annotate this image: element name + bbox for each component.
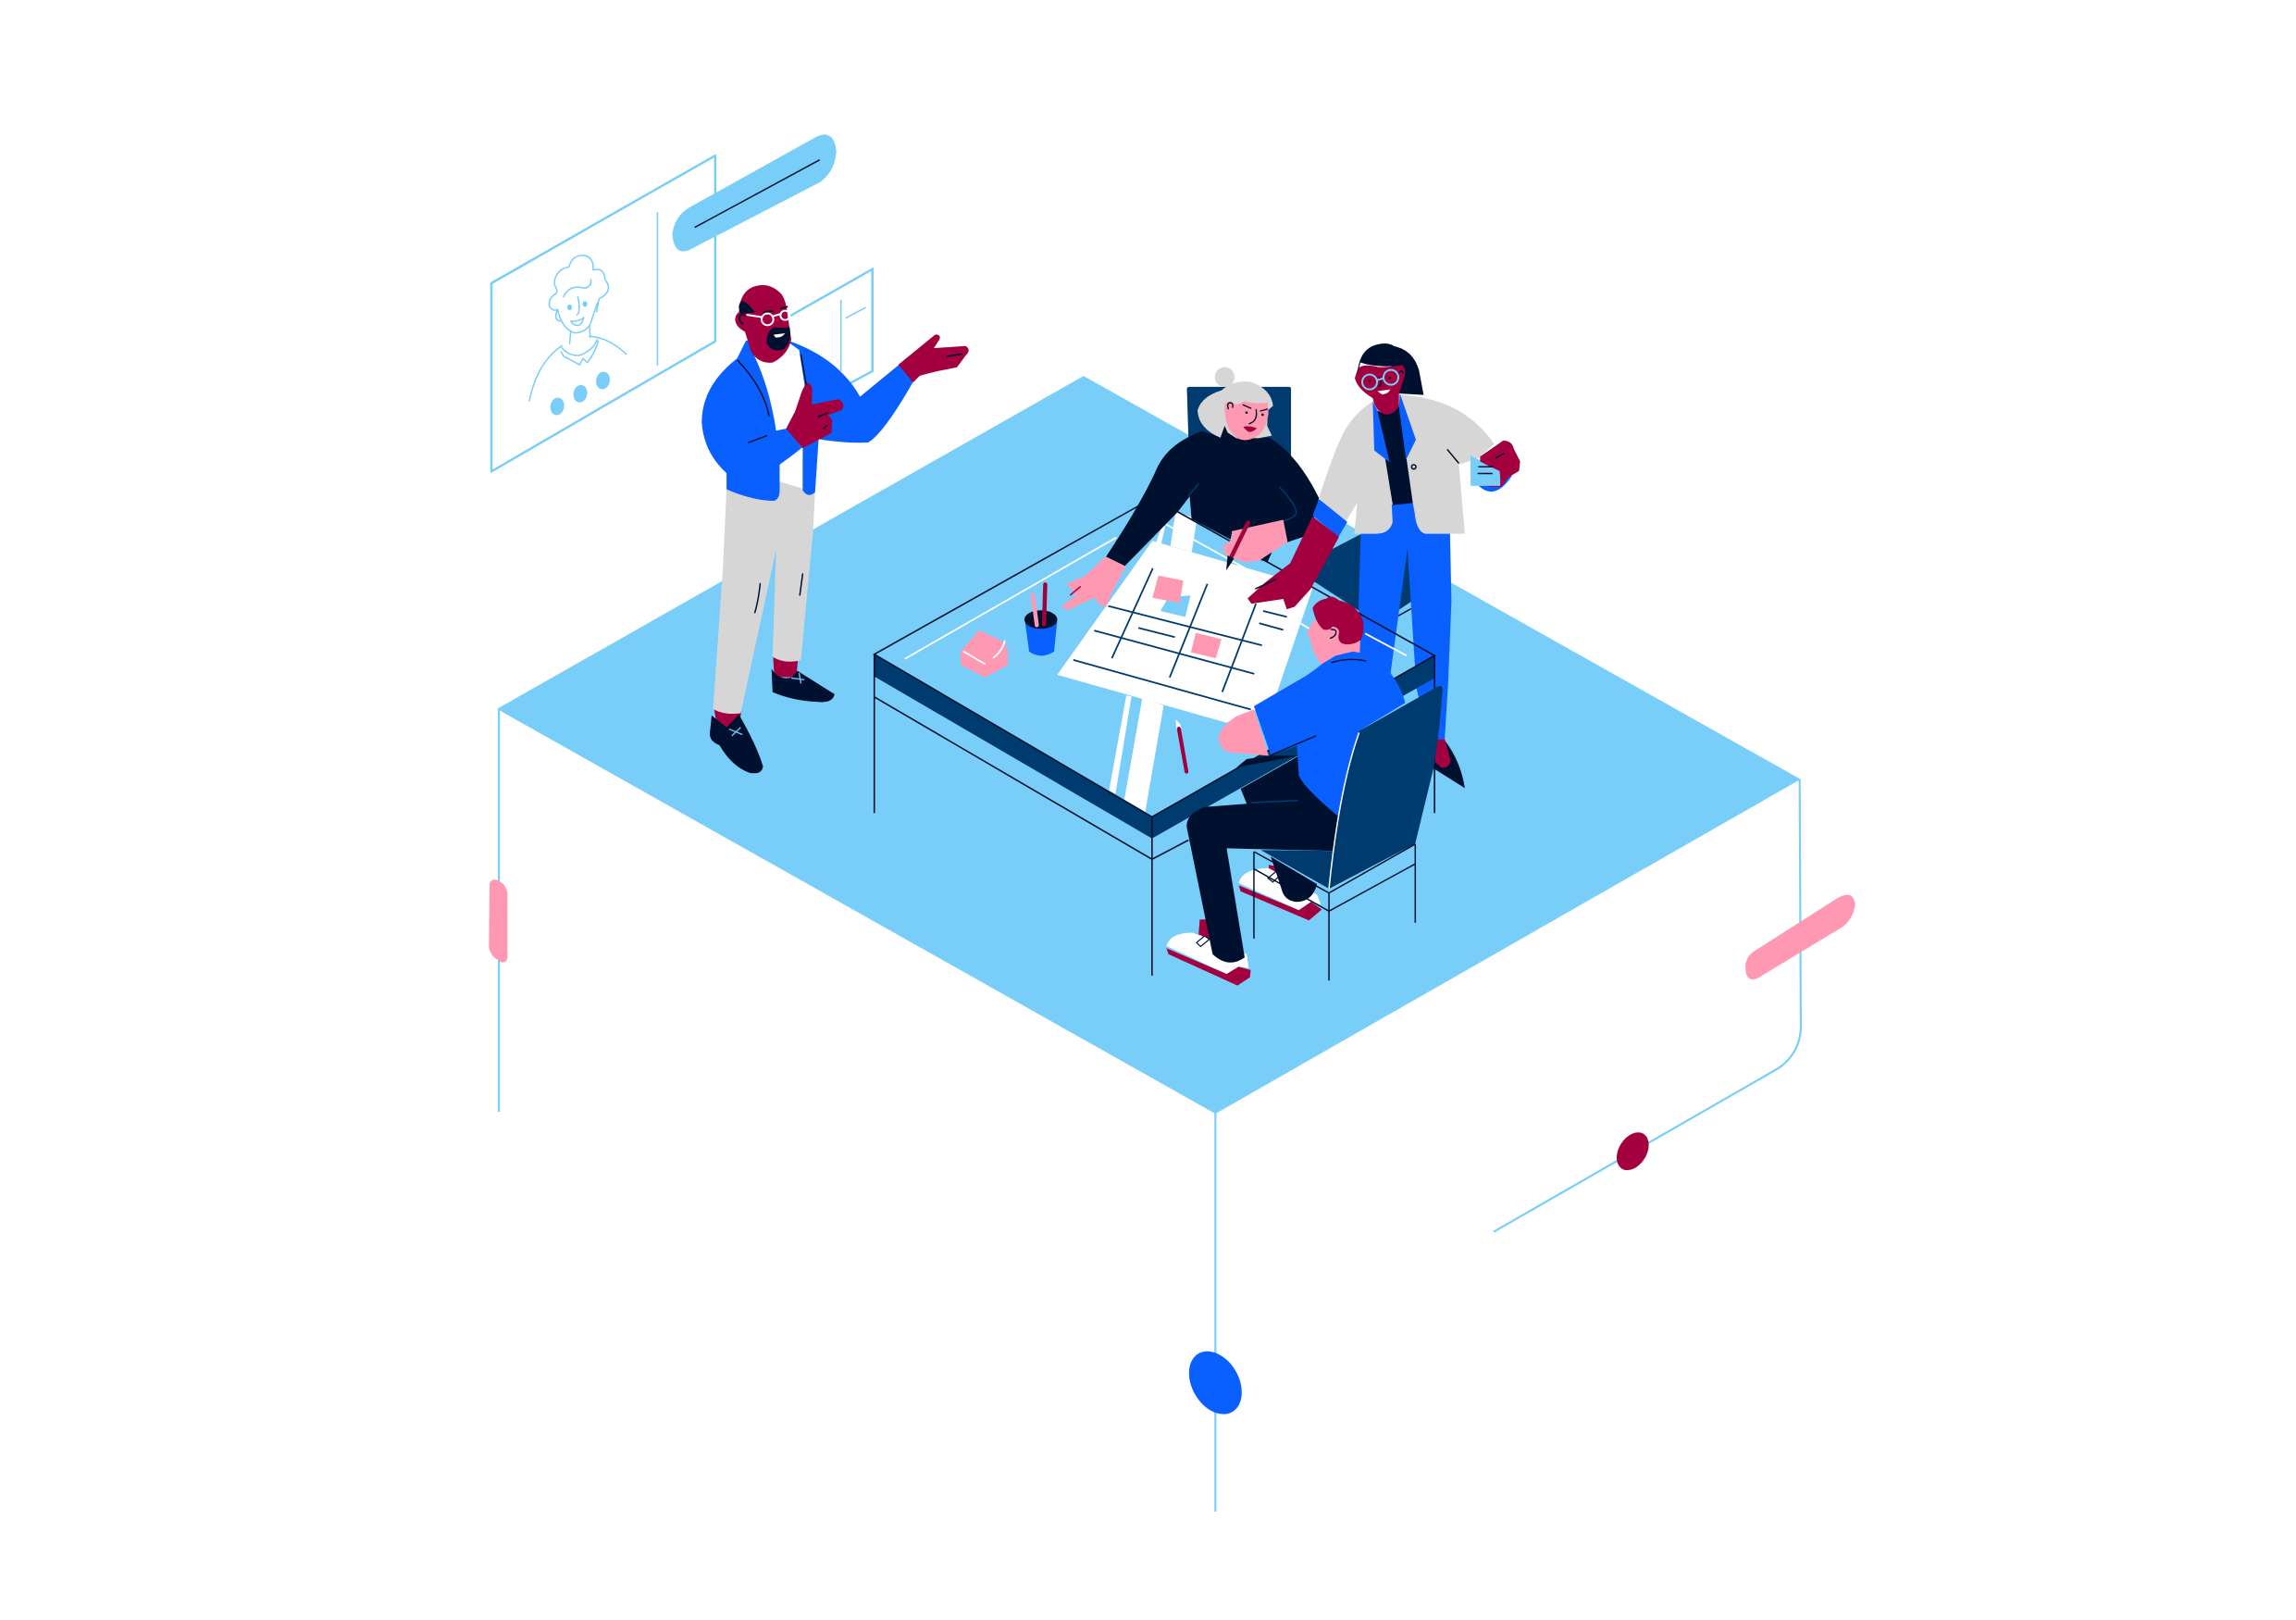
seated man torso and chair back [1219,652,1443,889]
writing hand [1222,520,1287,562]
lapels [1372,393,1416,462]
jacket [701,341,913,501]
wall panels and presenter [491,134,968,773]
three dots [548,368,613,418]
chair frame behind [1396,609,1411,617]
glasses [1362,370,1398,390]
collar and sleeve crease [1271,659,1366,755]
loose pencil [1175,719,1186,772]
desk reflections [905,524,1407,659]
isometric platform with support lines [498,377,1855,1512]
smile [774,333,785,338]
crimson marker [1610,1127,1656,1176]
presenter head [735,285,791,363]
trousers [714,481,815,714]
button [1411,465,1416,469]
socks and shoes [710,654,835,773]
paper reflection stripes [1109,512,1197,812]
desk outlines and legs [875,498,1434,976]
left support line [498,709,500,1112]
presenter man body [701,335,968,773]
ear and nose [1379,371,1403,386]
standing woman head and top [1355,343,1423,505]
chair back of seated woman [1187,387,1291,456]
pen [1226,523,1248,570]
hair [1312,597,1363,644]
eyes [1246,411,1264,416]
note lines [1478,454,1504,474]
table plan sheet [1057,541,1313,723]
platform surface [498,377,1800,1114]
chair back [1329,686,1443,889]
forearm [1219,709,1269,755]
top [1377,405,1413,505]
clothing creases [738,355,962,613]
centre support line [1214,1114,1216,1512]
plan grid lines [1074,568,1287,709]
smile [1377,390,1390,394]
desk edge band [875,654,1434,839]
pink marker right [1745,895,1855,979]
standing woman lower body [1319,394,1520,788]
shoe [1427,741,1465,788]
seated man head [1307,597,1363,667]
turtleneck notch [1220,426,1238,442]
sticky note block [961,630,1008,678]
right support line [1494,779,1801,1232]
hair [1198,381,1273,438]
ear [1331,629,1336,638]
dark chair behind standing woman [1309,535,1411,611]
pocket line [1447,449,1458,463]
seated woman body [1062,431,1319,610]
hand holding note [1480,441,1520,487]
brows and ear [739,306,788,324]
shirt [751,343,804,482]
left hand [1062,557,1125,610]
sneakers [1166,865,1322,986]
portrait sketch [529,255,627,401]
hair bun [1215,368,1235,387]
skull and neck [735,285,791,363]
face [1224,401,1269,440]
seated woman head [1198,368,1273,442]
hand cuff [1485,471,1501,487]
near leg [1186,755,1339,963]
chair seat [1260,812,1415,889]
side hair [738,301,755,314]
desk [875,498,1434,976]
wall label pill [673,134,837,252]
sticky notes on the plan [1152,576,1222,658]
pink marker left [489,879,507,963]
eyes [1369,377,1391,382]
face [1355,365,1405,415]
lips [1243,426,1257,432]
chair frame [1254,844,1415,980]
portrait wall panel [491,156,715,471]
standing woman's reaching arm [1248,499,1347,609]
glasses [747,311,789,325]
sweater seams [1188,484,1297,521]
brows, ear, nose [1228,403,1267,424]
trousers [1359,503,1451,740]
far leg [1271,856,1317,902]
background figures behind the table [1187,387,1520,788]
seated woman and reaching arm [1062,431,1347,610]
blue marker [1178,1342,1252,1424]
sleeve end [1260,546,1274,562]
sticky note [1471,455,1500,486]
sweater [1106,431,1319,567]
hand crease [1070,586,1081,595]
neck and face [1307,620,1360,667]
torso [1254,652,1405,816]
pointing hand [787,384,843,448]
pen cup [1024,584,1057,655]
beard [766,327,790,351]
open hand [899,335,968,381]
trouser crease [1251,801,1298,803]
jacket [1319,394,1495,534]
back hair [1391,345,1423,395]
seated man legs and seat [1166,755,1415,986]
phone circle [1477,471,1512,492]
chair highlight [1329,732,1359,889]
second wall panel [790,269,873,383]
fringe [1358,343,1405,375]
